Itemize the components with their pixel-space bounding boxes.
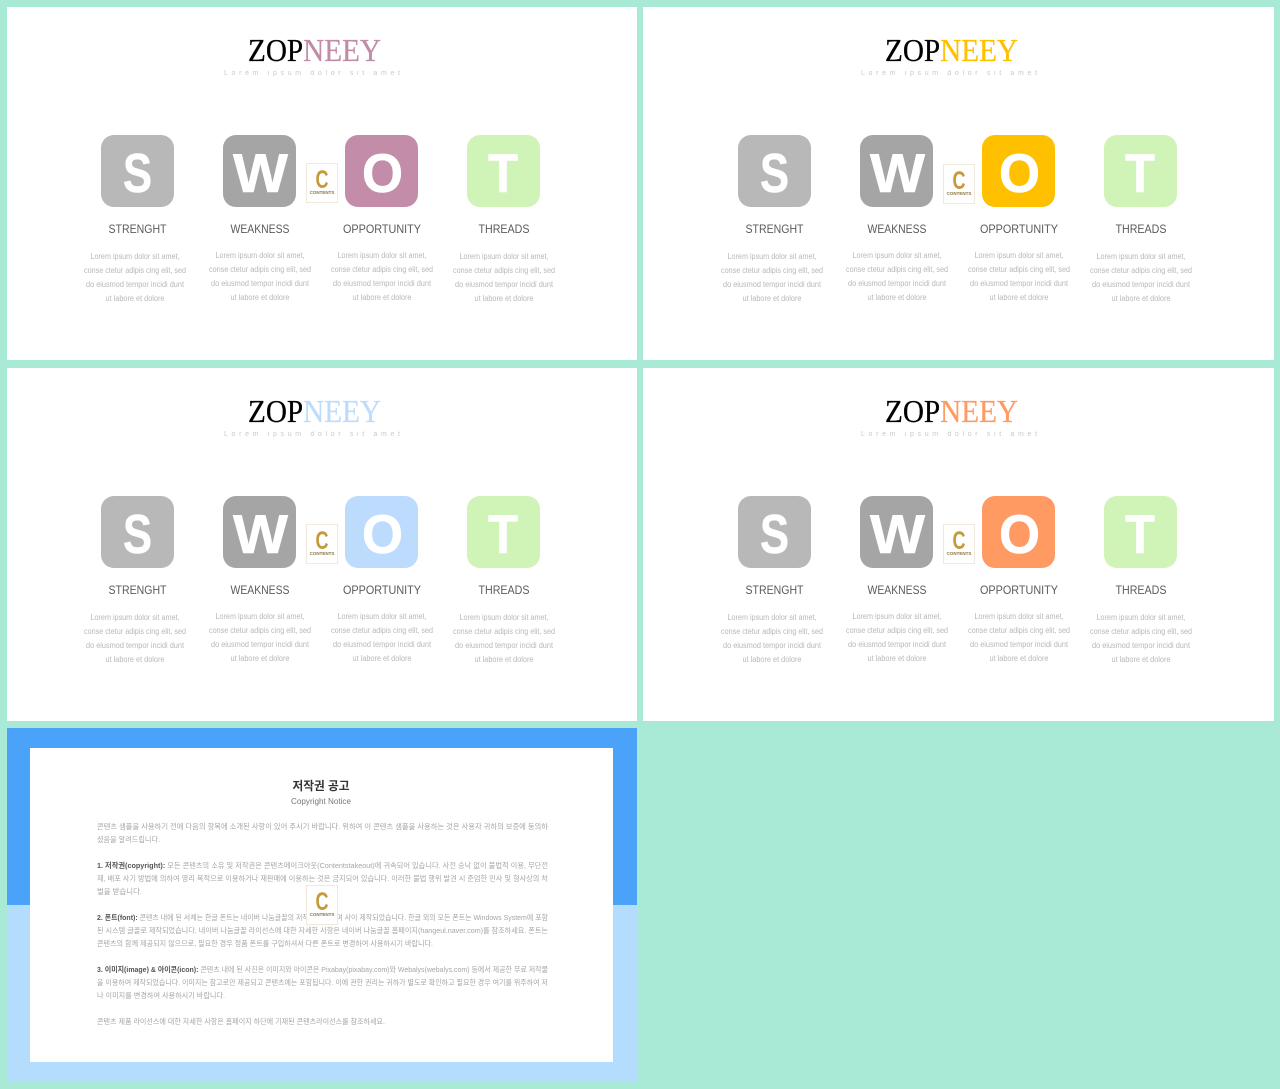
card: strength: do eiusmod tempor incidi dunt	[86, 641, 185, 650]
card: opportunity: Lorem ipsum dolor sit amet,	[974, 251, 1064, 260]
notice heading: 저작권 공고	[292, 778, 350, 793]
watermark badge: CONTENTS	[310, 551, 334, 556]
card: opportunity: ut labore et dolore	[352, 654, 412, 663]
panel: SWOT slide yellow	[643, 7, 1274, 360]
card: threads: conse ctetur adipis cing elit, sed	[453, 627, 555, 636]
watermark badge	[944, 524, 974, 564]
intro paragraph: 셨음을 알려드립니다.	[97, 834, 160, 844]
card: opportunity: O	[362, 142, 403, 204]
section: image and icon: 을 이용하여 제작되었습니다. 이미지는 참고로만 제공되고 콘텐츠에는 포함됩니다. 이에 관한 권리는 귀하가 별도로 확인하고 필요한 경우 여기를 위주하여 저	[97, 977, 548, 987]
watermark badge: C	[952, 527, 966, 555]
card: strength: do eiusmod tempor incidi dunt	[723, 641, 822, 650]
panel: copyright notice	[7, 728, 637, 1082]
section: image and icon: 3. 이미지(image) & 아이콘(icon): 콘텐츠 내에 된 사진은 이미지와 아이콘은 Pixabay(pixabay.com)와 Webalys(webalys.com) 등에서 제공한 무료 저작물	[97, 964, 548, 974]
card: threads	[453, 496, 555, 664]
card: weakness: Lorem ipsum dolor sit amet,	[852, 251, 942, 260]
title: ZOPNEEY	[248, 393, 381, 429]
card: weakness: do eiusmod tempor incidi dunt	[848, 640, 947, 649]
card: strength: conse ctetur adipis cing elit, sed	[721, 266, 823, 275]
card: weakness: Lorem ipsum dolor sit amet,	[216, 612, 304, 621]
title: ZOPNEEY	[248, 32, 381, 68]
section: copyright: 재, 배포 사기 방법에 의하여 영리 목적으로 이용하거나 재판매에 이용하는 것은 금지되어 있습니다. 이러한 불법 행위 발견 시 준엄한 민사 및 형사상의 처	[97, 873, 548, 883]
panel: SWOT slide orange	[643, 368, 1274, 721]
card: threads: ut labore et dolore	[474, 655, 534, 664]
card: strength: ut labore et dolore	[106, 655, 165, 664]
card: threads: Lorem ipsum dolor sit amet,	[460, 613, 548, 622]
card: opportunity	[968, 496, 1070, 663]
section: copyright: 벌을 받습니다.	[97, 886, 142, 896]
section: font	[97, 912, 548, 948]
card: threads: do eiusmod tempor incidi dunt	[1092, 280, 1191, 289]
card: strength: do eiusmod tempor incidi dunt	[86, 280, 185, 289]
card: weakness	[209, 135, 311, 302]
card: opportunity: OPPORTUNITY	[980, 222, 1058, 236]
card: opportunity: OPPORTUNITY	[343, 222, 421, 236]
watermark badge	[306, 524, 338, 564]
card: strength: S	[123, 142, 152, 204]
card: strength: STRENGHT	[746, 222, 804, 236]
watermark badge: CONTENTS	[310, 190, 334, 195]
card: opportunity: ut labore et dolore	[990, 293, 1049, 302]
card: threads: THREADS	[1116, 222, 1166, 236]
title: ZOPNEEY	[885, 32, 1018, 68]
card: opportunity: Lorem ipsum dolor sit amet,	[338, 251, 426, 260]
card: opportunity	[331, 496, 433, 663]
card: strength: STRENGHT	[108, 222, 167, 236]
card: weakness: WEAKNESS	[868, 583, 926, 597]
subtitle: Lorem ipsum dolor sit amet	[861, 431, 1037, 438]
card: opportunity: OPPORTUNITY	[980, 583, 1058, 597]
closing line: 콘텐츠 제품 라이선스에 대한 자세한 사항은 홈페이지 하단에 기재된 콘텐츠라이선스를 참조하세요.	[97, 1016, 385, 1026]
card: strength: ut labore et dolore	[106, 294, 165, 303]
card: opportunity: do eiusmod tempor incidi dunt	[970, 279, 1069, 288]
card: opportunity	[968, 135, 1070, 302]
card: strength: ut labore et dolore	[742, 294, 802, 303]
card: opportunity: ut labore et dolore	[352, 293, 412, 302]
card: weakness	[846, 496, 948, 663]
watermark badge: C	[952, 167, 966, 195]
card: threads: Lorem ipsum dolor sit amet,	[1096, 613, 1186, 622]
subtitle: Lorem ipsum dolor sit amet	[861, 70, 1037, 77]
card: opportunity: O	[999, 503, 1040, 565]
card: weakness: conse ctetur adipis cing elit, sed	[209, 626, 311, 635]
card: weakness: W	[870, 142, 925, 204]
section: image and icon	[97, 964, 548, 1000]
card: opportunity: Lorem ipsum dolor sit amet,	[974, 612, 1064, 621]
card: strength: S	[760, 142, 789, 204]
card: strength: do eiusmod tempor incidi dunt	[723, 280, 822, 289]
title: ZOPNEEY	[885, 393, 1018, 429]
card: weakness: ut labore et dolore	[868, 654, 927, 663]
card: strength	[721, 496, 823, 664]
card: strength: S	[760, 503, 789, 565]
card: weakness: do eiusmod tempor incidi dunt	[848, 279, 947, 288]
card: opportunity: conse ctetur adipis cing elit, sed	[331, 265, 433, 274]
card: threads	[1090, 135, 1192, 303]
card: strength: Lorem ipsum dolor sit amet,	[728, 252, 816, 261]
intro paragraph	[97, 821, 548, 844]
watermark badge: C	[316, 166, 328, 194]
card: strength: conse ctetur adipis cing elit, sed	[721, 627, 823, 636]
card: threads: T	[1125, 503, 1155, 565]
card: weakness: W	[233, 503, 288, 565]
section: image and icon: 나 이미지를 변경하여 사용하시기 바랍니다.	[97, 990, 225, 1000]
card: threads	[453, 135, 555, 303]
watermark badge	[306, 164, 338, 202]
card: weakness: W	[233, 142, 288, 204]
card: opportunity: conse ctetur adipis cing elit, sed	[331, 626, 433, 635]
watermark badge	[306, 886, 338, 924]
card: threads	[1090, 496, 1192, 664]
card: weakness: conse ctetur adipis cing elit, sed	[846, 265, 948, 274]
card: weakness: conse ctetur adipis cing elit, sed	[209, 265, 311, 274]
card: threads: T	[488, 142, 518, 204]
card: weakness: Lorem ipsum dolor sit amet,	[216, 251, 304, 260]
card: opportunity: do eiusmod tempor incidi dunt	[970, 640, 1069, 649]
card: threads: ut labore et dolore	[474, 294, 534, 303]
panel: SWOT slide pink	[7, 7, 637, 360]
card: strength: STRENGHT	[108, 583, 167, 597]
card: opportunity: ut labore et dolore	[990, 654, 1049, 663]
card: weakness: do eiusmod tempor incidi dunt	[211, 279, 310, 288]
card: strength	[721, 135, 823, 303]
card: threads: THREADS	[1116, 583, 1166, 597]
card: strength	[84, 496, 186, 664]
card: threads: conse ctetur adipis cing elit, sed	[1090, 627, 1192, 636]
card: threads: Lorem ipsum dolor sit amet,	[1096, 252, 1186, 261]
card: weakness: conse ctetur adipis cing elit, sed	[846, 626, 948, 635]
card: strength	[84, 135, 186, 303]
card: threads: T	[1125, 142, 1155, 204]
section: copyright	[97, 860, 548, 896]
card: opportunity: conse ctetur adipis cing elit, sed	[968, 265, 1070, 274]
card: weakness: ut labore et dolore	[230, 654, 290, 663]
card: opportunity	[331, 135, 433, 302]
notice subheading: Copyright Notice	[291, 797, 352, 806]
card: weakness: Lorem ipsum dolor sit amet,	[852, 612, 942, 621]
panel: SWOT slide light blue	[7, 368, 637, 721]
card: opportunity: O	[999, 142, 1040, 204]
card: weakness: W	[870, 503, 925, 565]
card: weakness: ut labore et dolore	[868, 293, 927, 302]
card: weakness	[846, 135, 948, 302]
watermark badge: C	[316, 527, 328, 555]
card: threads: conse ctetur adipis cing elit, sed	[1090, 266, 1192, 275]
card: strength: conse ctetur adipis cing elit, sed	[84, 627, 186, 636]
section: copyright: 1. 저작권(copyright): 모든 콘텐츠의 소유 및 저작권은 콘텐츠메이크아웃(Contentstakeout)에 귀속되어 있습니다. 사전 승낙 없이 불법적 이용, 무단전	[97, 860, 548, 870]
card: opportunity: conse ctetur adipis cing elit, sed	[968, 626, 1070, 635]
card: strength: S	[123, 503, 152, 565]
card: weakness: do eiusmod tempor incidi dunt	[211, 640, 310, 649]
section: font: 콘텐츠의 함께 제공되지 않으므로, 필요한 경우 정품 폰트를 구입하셔서 다른 폰트로 변경하여 사용하시기 바랍니다.	[97, 938, 433, 948]
card: strength: Lorem ipsum dolor sit amet,	[728, 613, 816, 622]
card: opportunity: do eiusmod tempor incidi dunt	[333, 279, 432, 288]
card: weakness: WEAKNESS	[230, 222, 290, 236]
card: weakness: WEAKNESS	[230, 583, 290, 597]
card: threads: do eiusmod tempor incidi dunt	[455, 641, 554, 650]
card: opportunity: Lorem ipsum dolor sit amet,	[338, 612, 426, 621]
watermark badge	[944, 164, 974, 204]
card: strength: Lorem ipsum dolor sit amet,	[90, 252, 180, 261]
card: threads: conse ctetur adipis cing elit, sed	[453, 266, 555, 275]
card: threads: Lorem ipsum dolor sit amet,	[460, 252, 548, 261]
card: opportunity: OPPORTUNITY	[343, 583, 421, 597]
card: threads: T	[488, 503, 518, 565]
card: opportunity: do eiusmod tempor incidi dunt	[333, 640, 432, 649]
card: threads: do eiusmod tempor incidi dunt	[455, 280, 554, 289]
subtitle: Lorem ipsum dolor sit amet	[224, 70, 400, 77]
card: strength: Lorem ipsum dolor sit amet,	[90, 613, 180, 622]
card: weakness: WEAKNESS	[868, 222, 926, 236]
card: threads: ut labore et dolore	[1112, 655, 1171, 664]
card: weakness	[209, 496, 311, 663]
watermark badge: CONTENTS	[310, 912, 334, 917]
card: threads: THREADS	[478, 222, 530, 236]
card: strength: conse ctetur adipis cing elit, sed	[84, 266, 186, 275]
card: opportunity: O	[362, 503, 403, 565]
watermark badge: C	[316, 888, 328, 916]
card: strength: STRENGHT	[746, 583, 804, 597]
watermark badge: CONTENTS	[947, 551, 971, 556]
card: threads: ut labore et dolore	[1112, 294, 1171, 303]
subtitle: Lorem ipsum dolor sit amet	[224, 431, 400, 438]
intro paragraph: 콘텐츠 샘플을 사용하기 전에 다음의 항목에 소개된 사항이 있어 주시기 바랍니다. 위하여 이 콘텐츠 샘플을 사용하는 것은 사용자 귀하의 보증에 동의하	[97, 821, 548, 831]
watermark badge: CONTENTS	[947, 191, 971, 196]
card: threads: do eiusmod tempor incidi dunt	[1092, 641, 1191, 650]
card: strength: ut labore et dolore	[742, 655, 802, 664]
section: font: 된 시스템 글꼴로 제작되었습니다. 네이버 나눔글꼴 라이선스에 대한 자세한 사항은 네이버 나눔글꼴 홈페이지(hangeul.naver.com)를 참조하세요. 폰트는	[97, 925, 548, 935]
section: font: 2. 폰트(font): 콘텐츠 내에 된 서체는 한글 폰트는 네이버 나눔글꼴의 저작권을 따르며 사이 제작되었습니다. 한글 외의 모든 폰트는 Windows System에 포함	[97, 912, 548, 922]
card: weakness: ut labore et dolore	[230, 293, 290, 302]
card: threads: THREADS	[478, 583, 530, 597]
